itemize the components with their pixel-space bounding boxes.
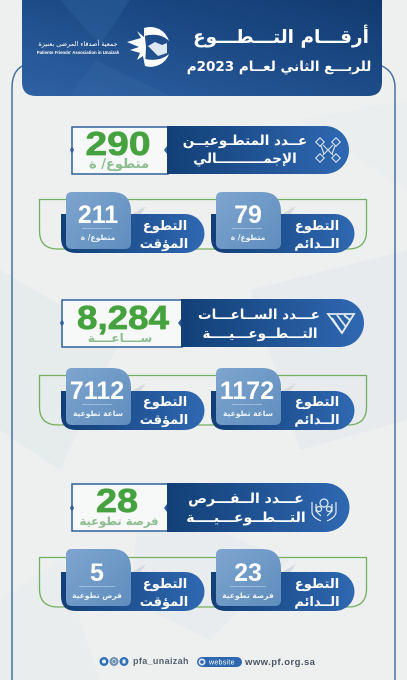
card: permanent opportunities: فرصة تطوعية xyxy=(222,591,274,600)
card: permanent hours: التطوع xyxy=(295,395,339,410)
icon: hands holding xyxy=(312,499,336,521)
icon: joined hands xyxy=(316,138,340,162)
card: permanent hours: 1172 xyxy=(220,377,274,405)
card: temporary opportunities: 5 xyxy=(90,559,104,587)
card: permanent hours xyxy=(211,368,354,430)
total value: 290 xyxy=(86,125,150,162)
heading: التـــطــوعـــيــــة xyxy=(202,326,318,342)
card: temporary volunteers: متطوع/ ة xyxy=(81,233,116,242)
website address: www.pf.org.sa xyxy=(244,657,316,668)
card: temporary opportunities: فرص تطوعية xyxy=(72,591,122,600)
association name xyxy=(37,39,120,55)
website pill xyxy=(197,657,242,667)
total unit: متطوع/ ة xyxy=(89,157,149,172)
card: permanent hours: الــدائم xyxy=(294,413,340,428)
card: permanent volunteers xyxy=(211,192,354,253)
card: permanent volunteers: متطوع/ ة xyxy=(231,233,266,242)
card: permanent opportunities xyxy=(211,549,354,611)
heading xyxy=(186,491,306,526)
heading: الإجمــــــــــالي xyxy=(193,151,297,167)
association name: Patients Friends' Association in Unaizah xyxy=(37,50,120,55)
heading xyxy=(183,133,307,167)
icon: social media xyxy=(100,657,128,666)
opportunities value: 28 xyxy=(96,482,138,519)
panel: total volunteers xyxy=(70,125,349,174)
opportunities unit: فرصة تطوعية xyxy=(79,514,159,529)
card: temporary hours xyxy=(61,368,204,430)
social handle: pfa_unaizah xyxy=(133,656,189,666)
heading: عـــدد الــفـــرص xyxy=(188,491,304,507)
card: temporary volunteers: المؤقت xyxy=(140,237,188,252)
card: permanent volunteers: التطوع xyxy=(295,219,339,234)
card: temporary hours: 7112 xyxy=(70,377,124,405)
panel: opportunities breakdown xyxy=(40,549,366,611)
card: permanent opportunities: التطوع xyxy=(295,577,339,592)
card: permanent hours: ساعة تطوعية xyxy=(223,409,273,418)
card: temporary volunteers xyxy=(61,192,204,253)
panel: total hours xyxy=(60,299,364,347)
icon: association logo xyxy=(127,27,169,67)
association name: جمعية أصدقاء المرضى بعنيزة xyxy=(38,39,118,48)
card: temporary hours: المؤقت xyxy=(140,413,188,428)
header banner xyxy=(22,0,382,96)
footer contacts xyxy=(100,656,316,668)
title: أرقـــام التـــطـــوع xyxy=(193,25,369,48)
website pill: website xyxy=(208,660,235,666)
card: permanent opportunities: الــدائم xyxy=(294,595,340,610)
card: permanent opportunities: 23 xyxy=(234,559,262,587)
card: permanent volunteers: 79 xyxy=(234,201,262,229)
heading: التـــطــوعـــيــــة xyxy=(186,510,306,526)
card: permanent volunteers: الــدائم xyxy=(294,237,340,252)
panel: volunteers breakdown xyxy=(40,192,366,253)
card: temporary opportunities xyxy=(61,549,204,611)
heading: عـــدد الســاعـــات xyxy=(198,307,320,323)
hours value: 8,284 xyxy=(77,299,170,336)
hours unit: ســــاعــــة xyxy=(88,331,152,345)
card: temporary opportunities: التطوع xyxy=(143,577,187,592)
panel: hours breakdown xyxy=(40,368,366,430)
subtitle: للربـــع الثاني لعــام 2023م xyxy=(187,59,371,75)
card: temporary opportunities: المؤقت xyxy=(140,595,188,610)
heading xyxy=(198,307,320,342)
heading: عــدد المتطـوعيــن xyxy=(183,133,307,149)
card: temporary hours: التطوع xyxy=(143,395,187,410)
card: temporary volunteers: التطوع xyxy=(143,219,187,234)
icon: hours mark xyxy=(328,314,354,333)
card: temporary volunteers: 211 xyxy=(78,201,118,229)
panel: total opportunities xyxy=(70,482,350,532)
card: temporary hours: ساعة تطوعية xyxy=(73,409,123,418)
